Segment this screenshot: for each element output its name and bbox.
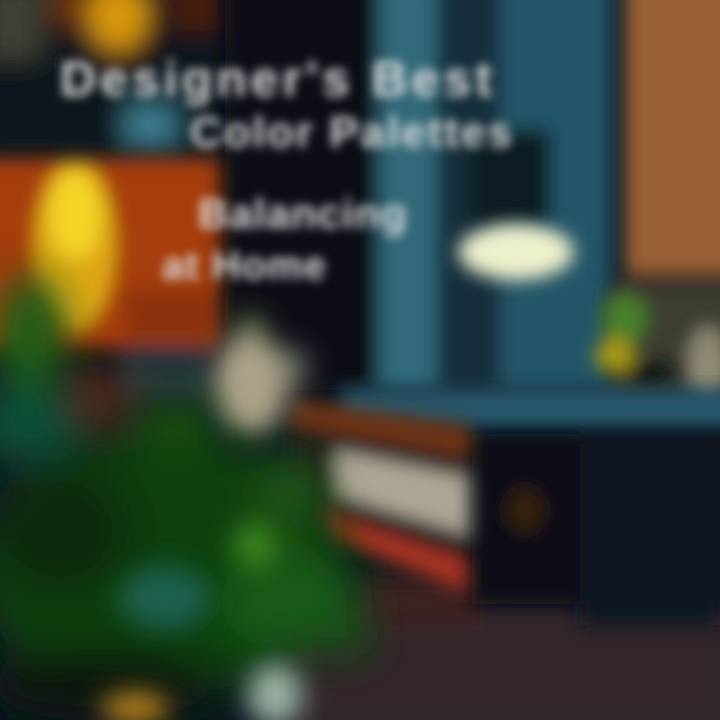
pendant lamp: [458, 224, 574, 280]
black cabinets: [472, 434, 720, 625]
subtitle line two: at Home: [162, 244, 327, 288]
title line two: Color Palettes: [190, 108, 514, 157]
plant highlights: [101, 521, 303, 720]
teal wall panels: [225, 0, 612, 390]
large green foreground plant: [0, 273, 371, 720]
subtitle line one: Balancing: [198, 190, 408, 237]
title line one: Designer's Best: [60, 51, 496, 107]
top left dark wall with warm light: [0, 0, 240, 155]
small yellow-green plant: [595, 292, 676, 389]
striped brown, beige and red bench: [290, 398, 470, 600]
figurine: [212, 313, 309, 437]
orange wall with glowing lamp: [0, 158, 220, 400]
teal countertop: [340, 388, 720, 430]
floor: [290, 575, 720, 720]
wood panel top right: [610, 0, 720, 403]
